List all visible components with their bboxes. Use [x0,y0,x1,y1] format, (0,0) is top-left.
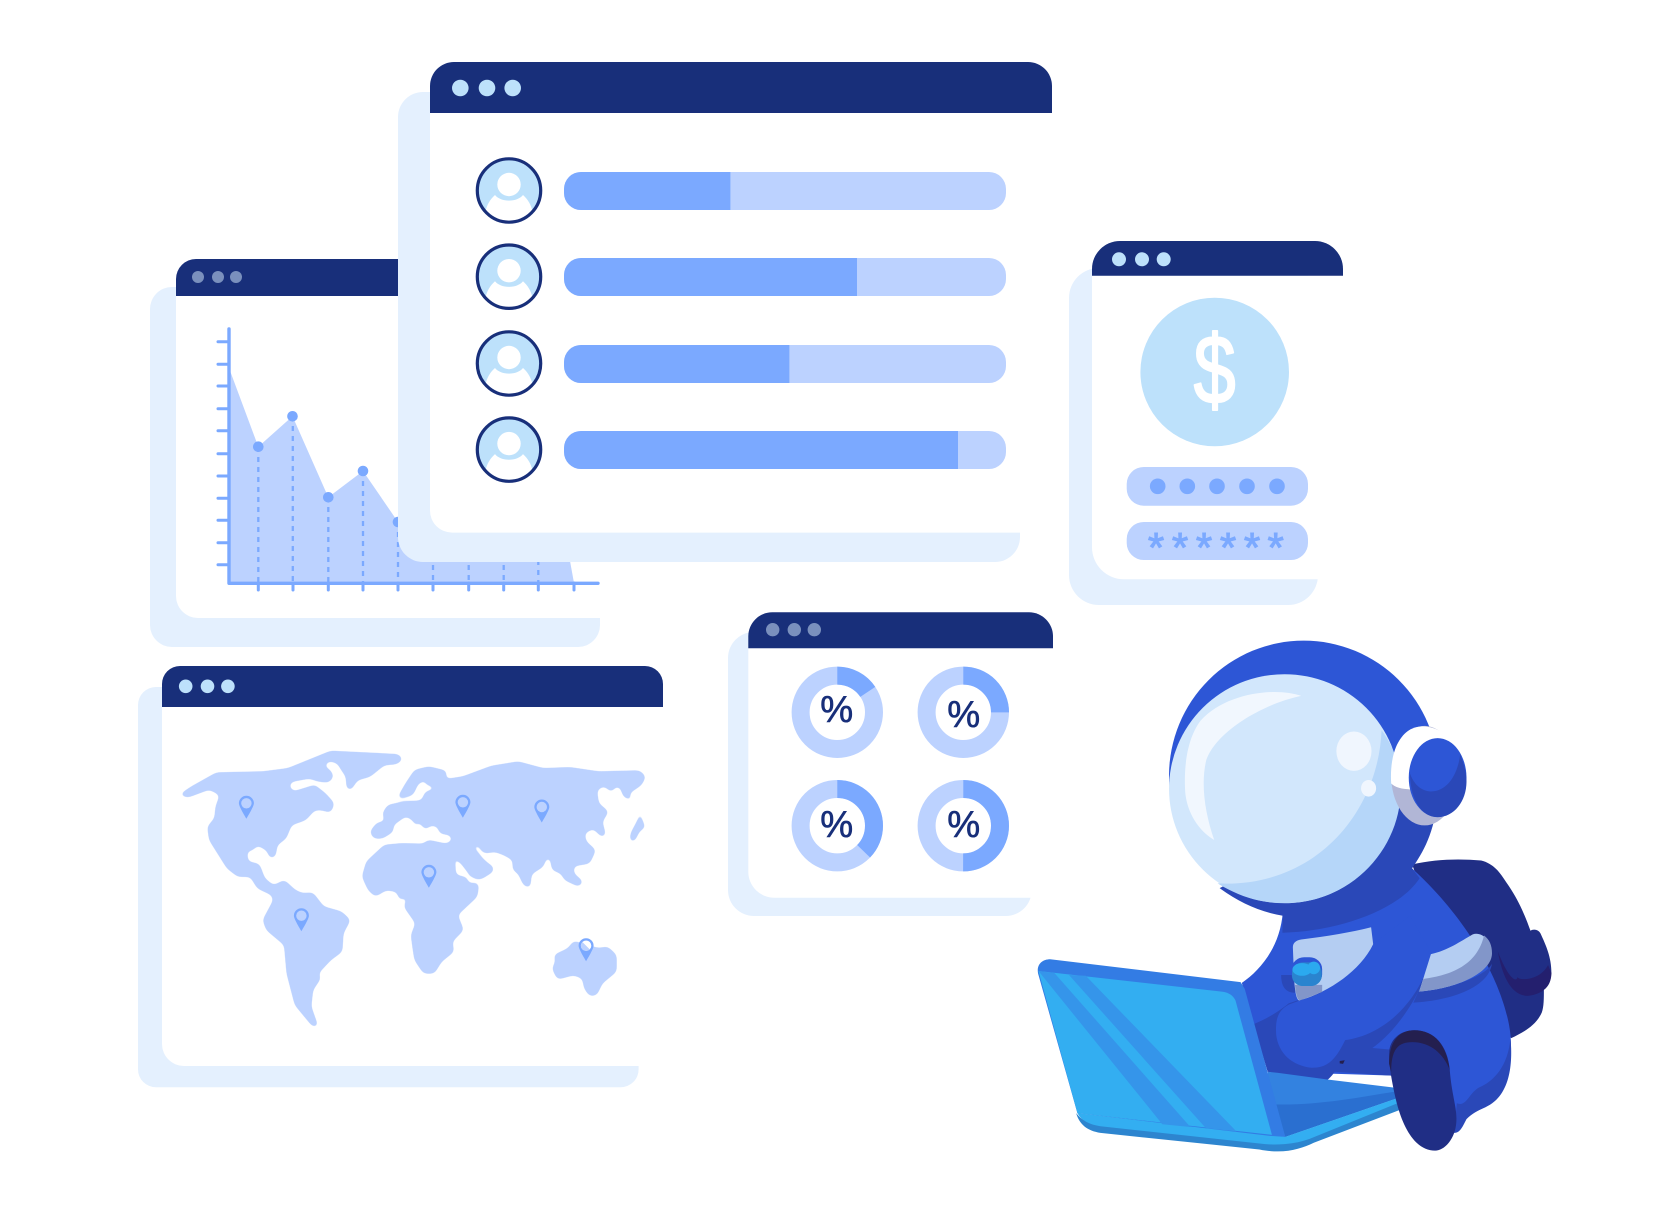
password field: * [1220,524,1236,571]
progress bar 3 [564,345,1006,383]
map pin: Asia [534,800,549,822]
icon: dollar coin: $ [1194,316,1236,424]
panel: payment window [1069,241,1343,605]
chart window title bar [176,259,420,296]
avatar 4 [477,418,541,481]
donut 1: % [820,689,853,730]
donut window title bar [748,612,1053,648]
map window title bar [162,666,663,707]
donut 2: % [947,694,980,735]
progress bar 4 [564,431,1006,469]
laptop base [1076,1072,1400,1151]
password field: * [1196,524,1212,571]
panel: percentage donuts window [728,612,1053,916]
users window title bar [430,62,1052,113]
astronaut with laptop [1038,641,1551,1151]
chest button [1292,957,1322,986]
boot [1389,1030,1456,1151]
password field: * [1148,524,1164,571]
password field [1127,522,1308,571]
map pin: Europe [455,795,470,818]
helmet ear piece [1391,726,1466,825]
panel: line chart window [150,259,600,647]
helmet [1169,641,1438,933]
donut 3 [801,789,874,862]
chest panel [1281,927,1373,1001]
body [1242,868,1511,1133]
world map [179,751,646,1027]
progress bar 1 [564,172,1006,210]
map pin: Africa [421,865,436,888]
avatar 1 [477,159,541,222]
donut 2 [927,676,1000,749]
donut 4: % [947,804,980,845]
map pin: South America [294,908,309,931]
card number field [1127,467,1308,506]
panel: world map window [138,666,663,1087]
laptop screen [1038,959,1285,1137]
avatar 3 [477,332,541,395]
side strap [1419,934,1492,992]
map pin: Australia [579,938,594,961]
area chart [218,329,598,590]
avatar 2 [477,245,541,308]
donut 1 [801,676,874,749]
backpack [1412,859,1551,1038]
password field: * [1268,524,1284,571]
map pin: North America [239,796,254,819]
password field: * [1172,524,1188,571]
panel: users progress window [398,62,1052,562]
donut 3: % [820,804,853,845]
payment window title bar [1092,241,1343,276]
arm [1276,916,1432,1068]
icon: dollar coin [1140,298,1289,446]
password field: * [1244,524,1260,571]
donut 4 [927,789,1000,862]
progress bar 2 [564,258,1006,296]
